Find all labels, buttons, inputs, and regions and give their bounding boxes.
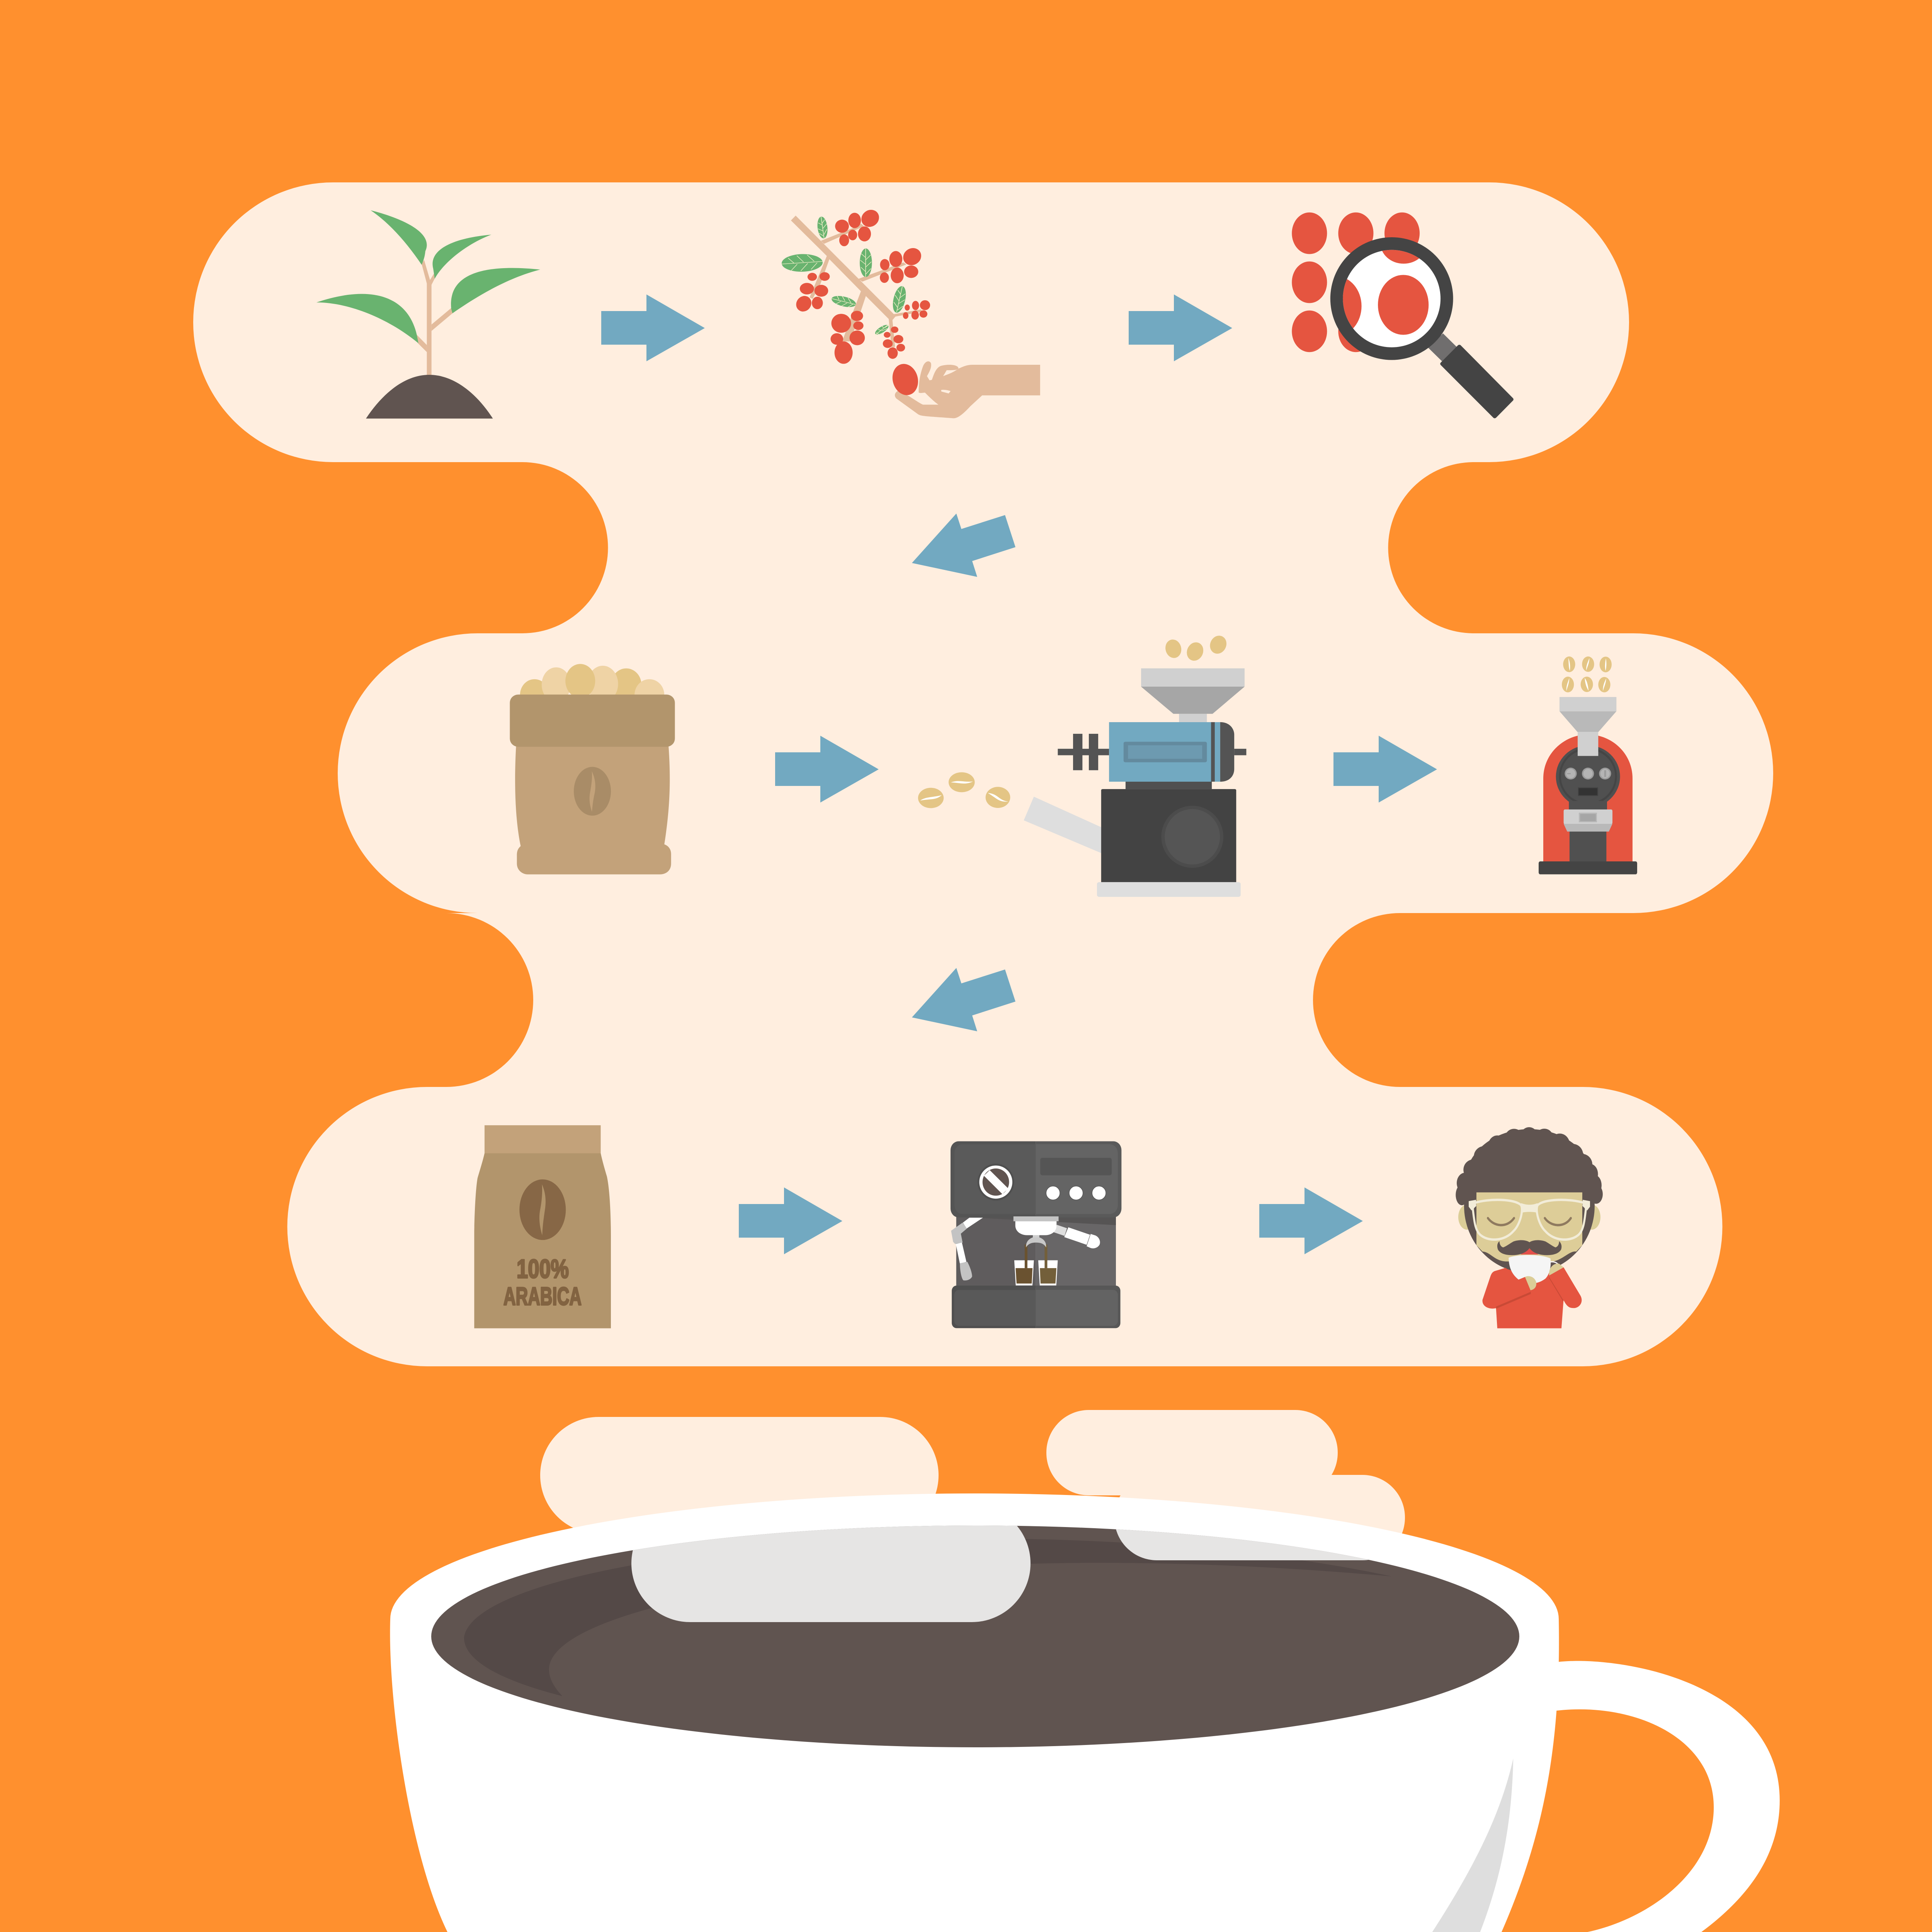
icon: magnifying glass over cherries (1292, 213, 1512, 417)
steam: upper right cream pill (1046, 1410, 1338, 1495)
panel: cream process cloud (193, 182, 1773, 1366)
arrow: step 2 to 3 (1129, 294, 1232, 361)
icon: green beans leaving huller machine (918, 635, 1246, 897)
icon: espresso machine (951, 1141, 1121, 1328)
arrow: step 1 to 2 (601, 294, 705, 361)
coffee shadow (464, 1538, 1392, 1696)
icon: coffee bag (474, 1125, 611, 1328)
coffee surface (431, 1526, 1519, 1747)
steam reflection in coffee (631, 1526, 1369, 1622)
arrow: step 5 to 6 (1333, 736, 1437, 803)
arrow: step 8 to 9 (1259, 1187, 1363, 1254)
arrow: step 3 to 4 (912, 514, 1015, 577)
text: bag label line 1: 100% (517, 1254, 569, 1284)
icon: seedling in soil (316, 210, 540, 418)
text: bag label line 2: ARABICA (503, 1282, 582, 1310)
arrow: step 4 to 5 (775, 736, 879, 803)
arrow: step 7 to 8 (739, 1187, 842, 1254)
infographic canvas (193, 182, 1780, 1932)
icon: red roaster (1539, 656, 1637, 874)
arrow: step 6 to 7 (912, 968, 1015, 1031)
icon: coffee branch with cherries and picking hand (781, 208, 1040, 418)
steam: left cream pill (540, 1417, 939, 1534)
steam: lower right cream pill (1114, 1475, 1405, 1560)
icon: sack of beans (510, 664, 675, 874)
coffee cup (390, 1475, 1780, 1932)
cup highlight (1432, 1759, 1513, 1932)
icon: man with afro sipping coffee (1456, 1127, 1603, 1328)
